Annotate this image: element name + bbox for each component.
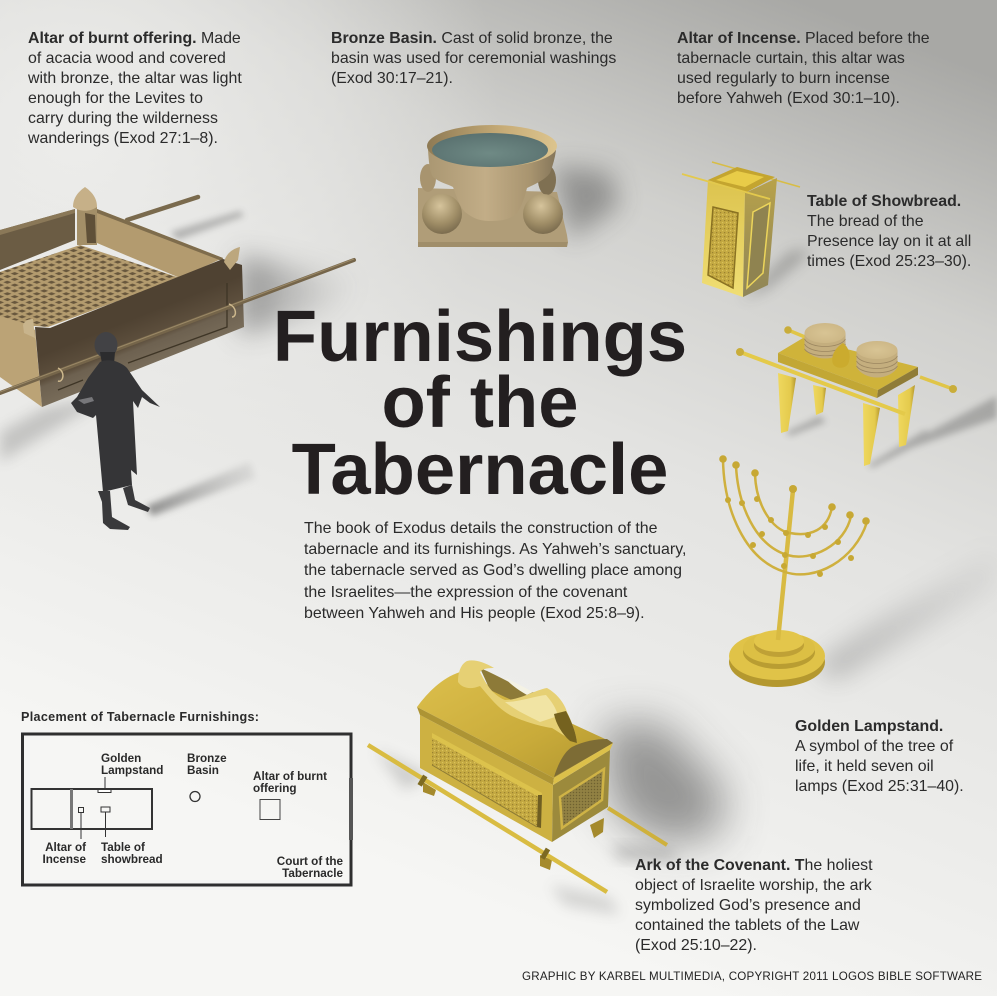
front outer side	[35, 259, 244, 407]
incense altar left face	[702, 180, 745, 297]
illustration: altar of burnt offering	[0, 187, 354, 407]
caption: ark of the covenant: object of Israelite worship, the ark	[635, 877, 872, 894]
caption: bronze basin: (Exod 30:17–21).	[331, 70, 453, 87]
front pole with rings	[0, 259, 354, 393]
intro text: the Israelites—the expression of the covenant	[304, 584, 628, 601]
court of the tabernacle	[22, 734, 351, 885]
caption: altar of burnt offering: with bronze, the altar was light	[27, 70, 242, 87]
diagram labels: Lampstand	[101, 764, 163, 777]
caption: ark of the covenant	[635, 857, 873, 954]
caption: ark of the covenant: (Exod 25:10–22).	[635, 937, 757, 954]
caption: altar of burnt offering	[27, 30, 242, 147]
caption: golden lampstand: lamps (Exod 25:31–40).	[795, 778, 964, 795]
diagram heading: Placement of Tabernacle Furnishings:	[21, 710, 259, 724]
diagram labels: Tabernacle	[282, 867, 343, 880]
intro text: the tabernacle served as God’s dwelling place among	[304, 562, 682, 579]
intro text: tabernacle and its furnishings. As Yahweh’s sanctuary,	[304, 541, 686, 558]
table top	[778, 338, 918, 390]
caption: altar of burnt offering: carry during the wilderness	[28, 110, 218, 127]
caption: altar of burnt offering: Altar of burnt offering. Made	[28, 30, 241, 47]
basin rim and water	[427, 125, 557, 167]
caption: altar of burnt offering: of acacia wood and covered	[28, 50, 226, 67]
front panel lines	[58, 283, 227, 390]
caption: altar of burnt offering: wanderings (Exod 27:1–8).	[27, 130, 218, 147]
caption: golden lampstand: Golden Lampstand.	[795, 718, 943, 735]
caption: altar of incense: used regularly to burn incense	[677, 70, 890, 87]
cherubim on the mercy seat	[458, 660, 577, 743]
ark front face	[420, 715, 553, 842]
title	[273, 296, 687, 510]
court gate	[349, 778, 353, 840]
jug	[832, 343, 850, 368]
tent outline	[32, 789, 152, 829]
caption: table of showbread: times (Exod 25:23–30).	[807, 253, 971, 270]
title: of the	[381, 362, 579, 443]
panels	[708, 207, 738, 288]
diagram labels: Altar of	[45, 841, 86, 854]
illustration: bronze basin	[418, 125, 568, 247]
intro text: The book of Exodus details the construction of the	[304, 520, 658, 537]
caption: table of showbread: Table of Showbread.	[807, 193, 961, 210]
basin side lumps	[420, 164, 436, 192]
horns	[23, 187, 240, 338]
ark far pole	[608, 808, 667, 845]
title: Tabernacle	[292, 429, 668, 510]
ark panels	[432, 738, 542, 827]
ark lid	[417, 672, 613, 778]
incense altar back pole	[712, 162, 800, 187]
caption: golden lampstand: A symbol of the tree of	[795, 738, 954, 755]
intro text: between Yahweh and His people (Exod 25:8–9).	[304, 605, 645, 622]
illustration: ark of the covenant	[368, 660, 667, 892]
diagram labels: Altar of burnt	[253, 770, 327, 783]
veil	[70, 789, 73, 829]
diagram labels: showbread	[101, 853, 163, 866]
basin marker	[190, 792, 200, 802]
diagram labels	[42, 752, 343, 880]
incense altar front pole	[682, 174, 770, 199]
caption: ark of the covenant: symbolized God’s presence and	[635, 897, 861, 914]
caption: altar of burnt offering: enough for the Levites to	[28, 90, 203, 107]
diagram labels: Basin	[187, 764, 219, 777]
diagram labels: Table of	[101, 841, 145, 854]
title: Furnishings	[273, 296, 687, 377]
caption: altar of incense: Altar of Incense. Placed before the	[677, 30, 930, 47]
illustration: golden lampstand	[719, 455, 870, 687]
spheres	[422, 194, 462, 234]
lampstand branches and stem	[723, 460, 867, 640]
caption: table of showbread: Presence lay on it at all	[807, 233, 971, 250]
illustration: human figure for scale	[71, 332, 160, 530]
caption: bronze basin	[331, 30, 616, 87]
illustration: altar of incense	[682, 162, 800, 297]
illustration: table of showbread	[736, 323, 957, 466]
caption: ark of the covenant: contained the tablets of the Law	[635, 917, 860, 934]
caption: altar of incense: before Yahweh (Exod 30:1–10).	[677, 90, 900, 107]
ark near pole	[368, 745, 607, 892]
incense altar right face	[743, 178, 777, 297]
basin bowl	[428, 150, 556, 221]
near pole	[740, 352, 905, 414]
caption: golden lampstand: life, it held seven oil	[795, 758, 934, 775]
diagram: placement plan	[22, 734, 353, 885]
lamps and knobs	[719, 455, 870, 577]
bronze grating	[0, 245, 180, 327]
credit line: GRAPHIC BY KARBEL MULTIMEDIA, COPYRIGHT 2011 LOGOS BIBLE SOFTWARE	[522, 970, 982, 983]
altar of incense marker	[78, 808, 84, 839]
left outer side	[0, 316, 42, 407]
diagram labels: Court of the	[277, 855, 343, 868]
table legs	[778, 373, 915, 466]
altar interior walls	[0, 209, 223, 278]
caption: altar of incense: tabernacle curtain, this altar was	[677, 50, 905, 67]
basin base	[418, 188, 568, 242]
loaves of bread	[804, 323, 898, 378]
caption: table of showbread	[807, 193, 971, 270]
caption: bronze basin: Bronze Basin. Cast of solid bronze, the	[331, 30, 613, 47]
diagram labels: Golden	[101, 752, 141, 765]
burnt offering marker	[260, 800, 280, 820]
cast shadows	[0, 165, 997, 915]
back pole	[127, 197, 198, 220]
far poles	[788, 330, 953, 389]
ark feet	[423, 782, 604, 870]
caption: ark of the covenant: Ark of the Covenant. The holiest	[635, 857, 873, 874]
caption: table of showbread: The bread of the	[807, 213, 924, 230]
incense altar top	[708, 167, 775, 193]
intro text	[304, 520, 686, 622]
lampstand base	[729, 630, 825, 687]
caption: golden lampstand	[795, 718, 964, 795]
lampstand marker	[98, 777, 111, 792]
caption: bronze basin: basin was used for ceremonial washings	[331, 50, 616, 67]
ark right face	[552, 750, 610, 842]
diagram labels: Incense	[42, 853, 86, 866]
table marker	[101, 807, 110, 837]
caption: altar of incense	[677, 30, 930, 107]
diagram labels: Bronze	[187, 752, 227, 765]
diagram labels: offering	[253, 782, 296, 795]
